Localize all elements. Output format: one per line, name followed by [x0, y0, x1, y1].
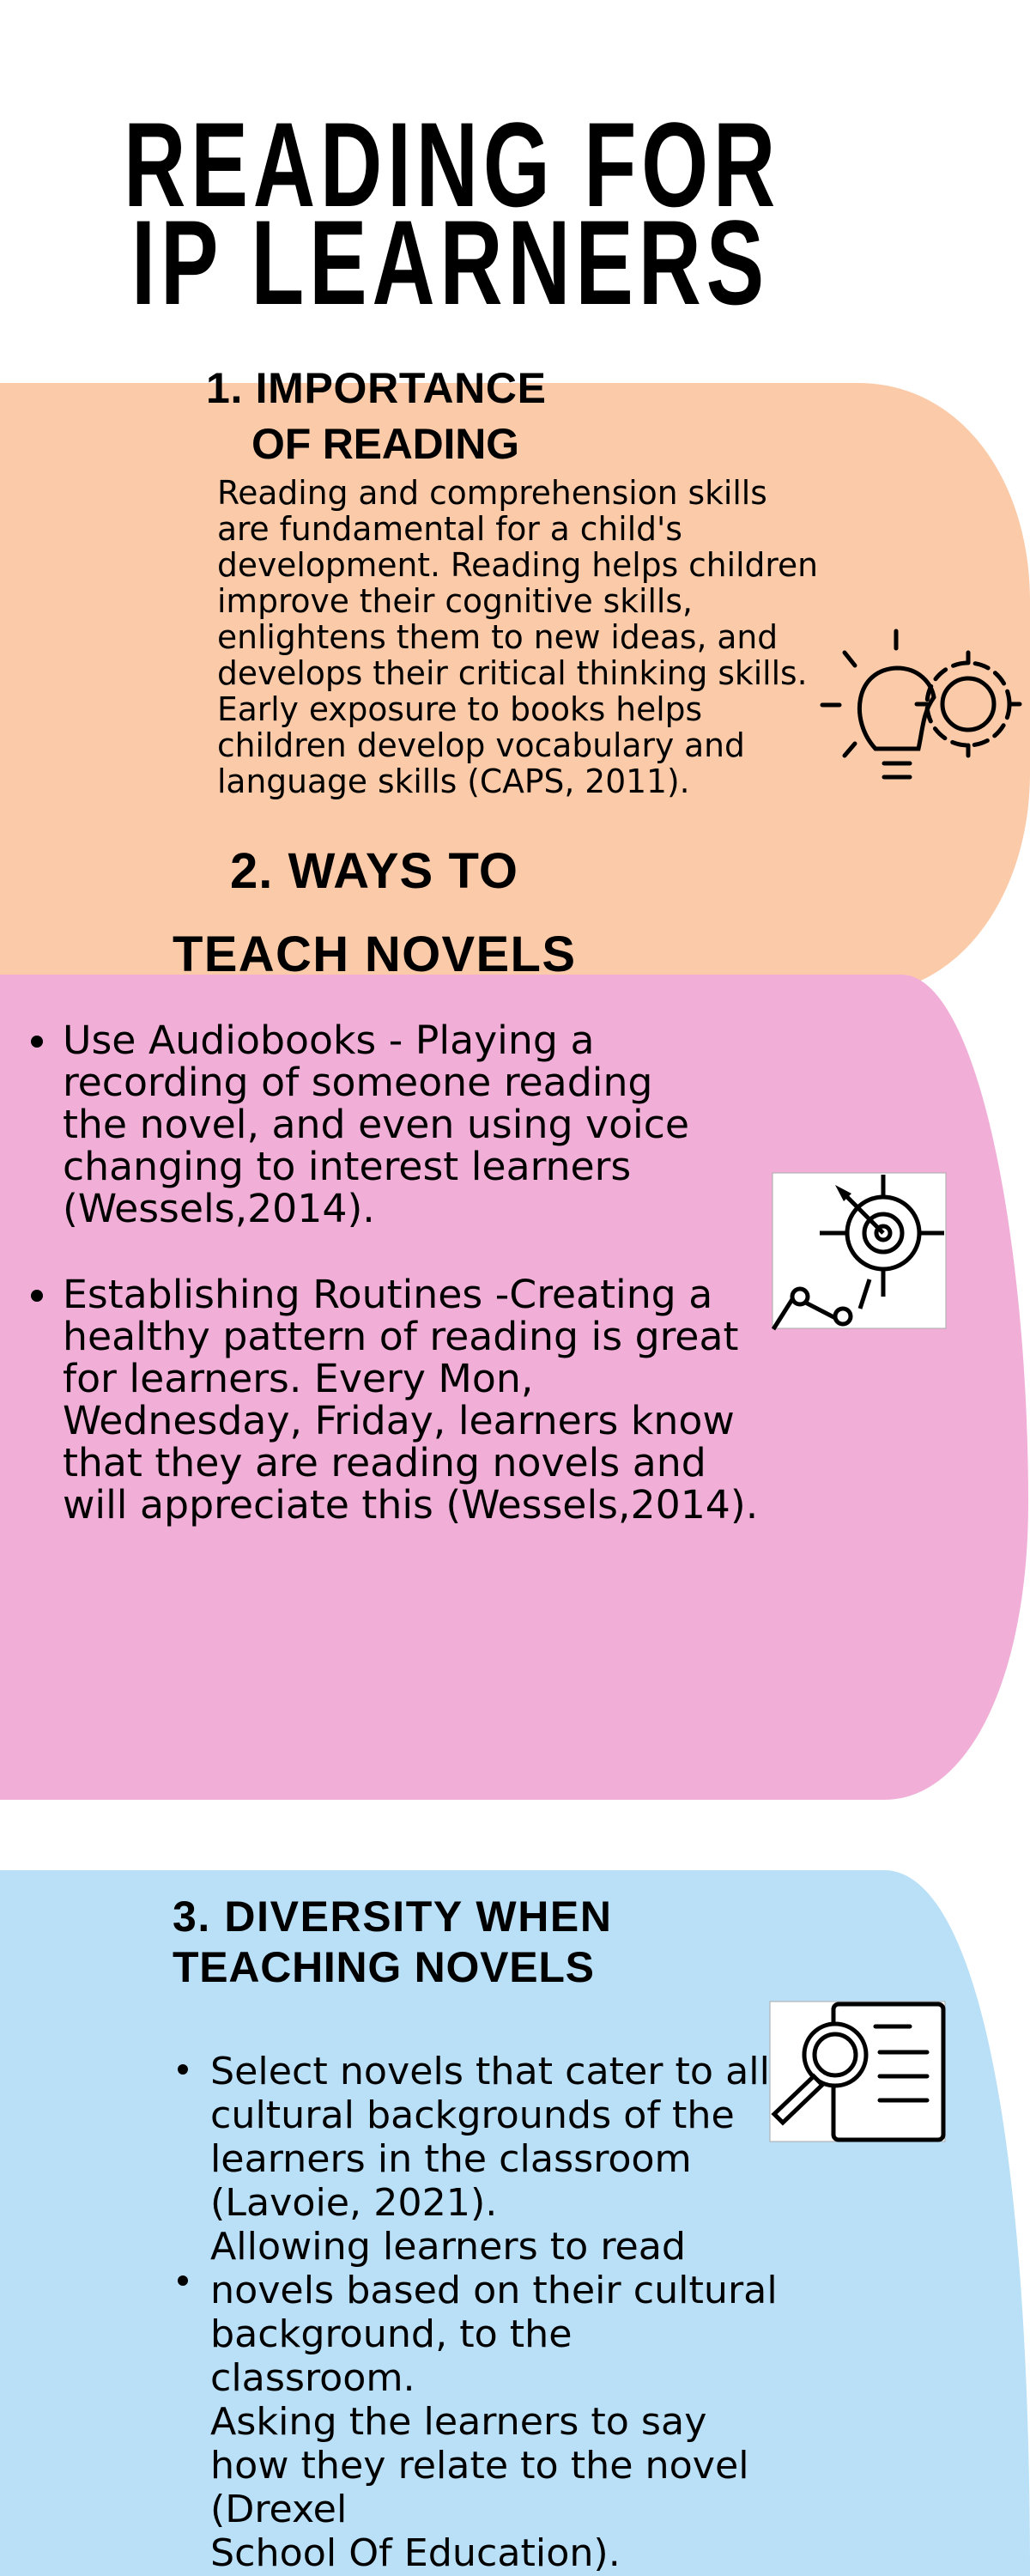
heading: importance of reading: OF READING	[251, 420, 519, 468]
bullets: diversity: (Lavoie, 2021).	[210, 2181, 497, 2225]
bullet: routines: will appreciate this (Wessels,2014).	[63, 1483, 758, 1528]
bullets: diversity: School Of Education).	[210, 2531, 621, 2575]
heading: diversity: TEACHING NOVELS	[173, 1943, 594, 1991]
title: READING FOR	[124, 97, 780, 232]
bullets: diversity: Allowing learners to read	[210, 2225, 686, 2269]
text block: importance body	[217, 475, 818, 801]
bullets: diversity: Asking the learners to say	[210, 2400, 706, 2444]
panel: importance of reading	[0, 364, 1030, 994]
bullet: audiobooks	[31, 1018, 689, 1231]
title	[124, 97, 780, 330]
text block: importance body: Reading and comprehension skills	[217, 475, 767, 513]
bullet: routines: for learners. Every Mon,	[63, 1357, 533, 1401]
bullet: audiobooks: Use Audiobooks - Playing a	[63, 1018, 594, 1063]
bullet: audiobooks: the novel, and even using voice	[63, 1103, 689, 1147]
icon: lightbulb and gear	[822, 631, 1020, 777]
bullet: routines: Wednesday, Friday, learners know	[63, 1399, 735, 1443]
title: IP LEARNERS	[131, 195, 769, 330]
panel: diversity when teaching novels	[0, 1870, 1030, 2576]
bullets: diversity: novels based on their cultural	[210, 2269, 778, 2312]
bullet: audiobooks: recording of someone reading	[63, 1060, 652, 1105]
heading: importance of reading	[206, 364, 546, 468]
bullets: diversity: classroom.	[210, 2356, 415, 2400]
heading: ways to teach novels: TEACH NOVELS	[173, 927, 575, 982]
bullet: audiobooks: changing to interest learners	[63, 1145, 631, 1189]
bullets: diversity: how they relate to the novel	[210, 2444, 749, 2488]
bullets: diversity: Select novels that cater to all	[210, 2050, 770, 2093]
bullets: diversity: learners in the classroom	[210, 2137, 692, 2181]
heading: ways to teach novels: 2. WAYS TO	[230, 843, 518, 899]
text block: importance body: language skills (CAPS, 2011).	[217, 763, 690, 801]
heading: diversity: 3. DIVERSITY WHEN	[173, 1893, 611, 1941]
bullet: routines: that they are reading novels and	[63, 1441, 706, 1485]
text block: importance body: children develop vocabulary and	[217, 727, 745, 765]
text block: importance body: development. Reading helps children	[217, 547, 818, 585]
text block: importance body: enlightens them to new ideas, and	[217, 619, 778, 657]
icon: document with magnifier	[770, 2002, 945, 2142]
panel: ways to teach novels	[0, 975, 1028, 1800]
text block: importance body: Early exposure to books helps	[217, 691, 702, 729]
bullet: routines: Establishing Routines -Creating a	[63, 1273, 712, 1317]
bullets: diversity	[178, 2050, 778, 2575]
bullet: routines: healthy pattern of reading is great	[63, 1315, 738, 1359]
bullets: diversity: cultural backgrounds of the	[210, 2093, 735, 2137]
heading: diversity	[173, 1893, 611, 1991]
heading: ways to teach novels	[173, 843, 575, 982]
icon: target with chart	[772, 1173, 946, 1329]
text block: importance body: develops their critical thinking skills.	[217, 655, 808, 693]
heading: importance of reading: 1. IMPORTANCE	[206, 364, 546, 412]
bullet: routines	[31, 1273, 758, 1528]
text block: importance body: improve their cognitive skills,	[217, 583, 693, 621]
bullets: diversity: (Drexel	[210, 2488, 347, 2531]
text block: importance body: are fundamental for a child's	[217, 511, 682, 549]
bullet: audiobooks: (Wessels,2014).	[63, 1187, 375, 1231]
bullets: diversity: background, to the	[210, 2312, 573, 2356]
